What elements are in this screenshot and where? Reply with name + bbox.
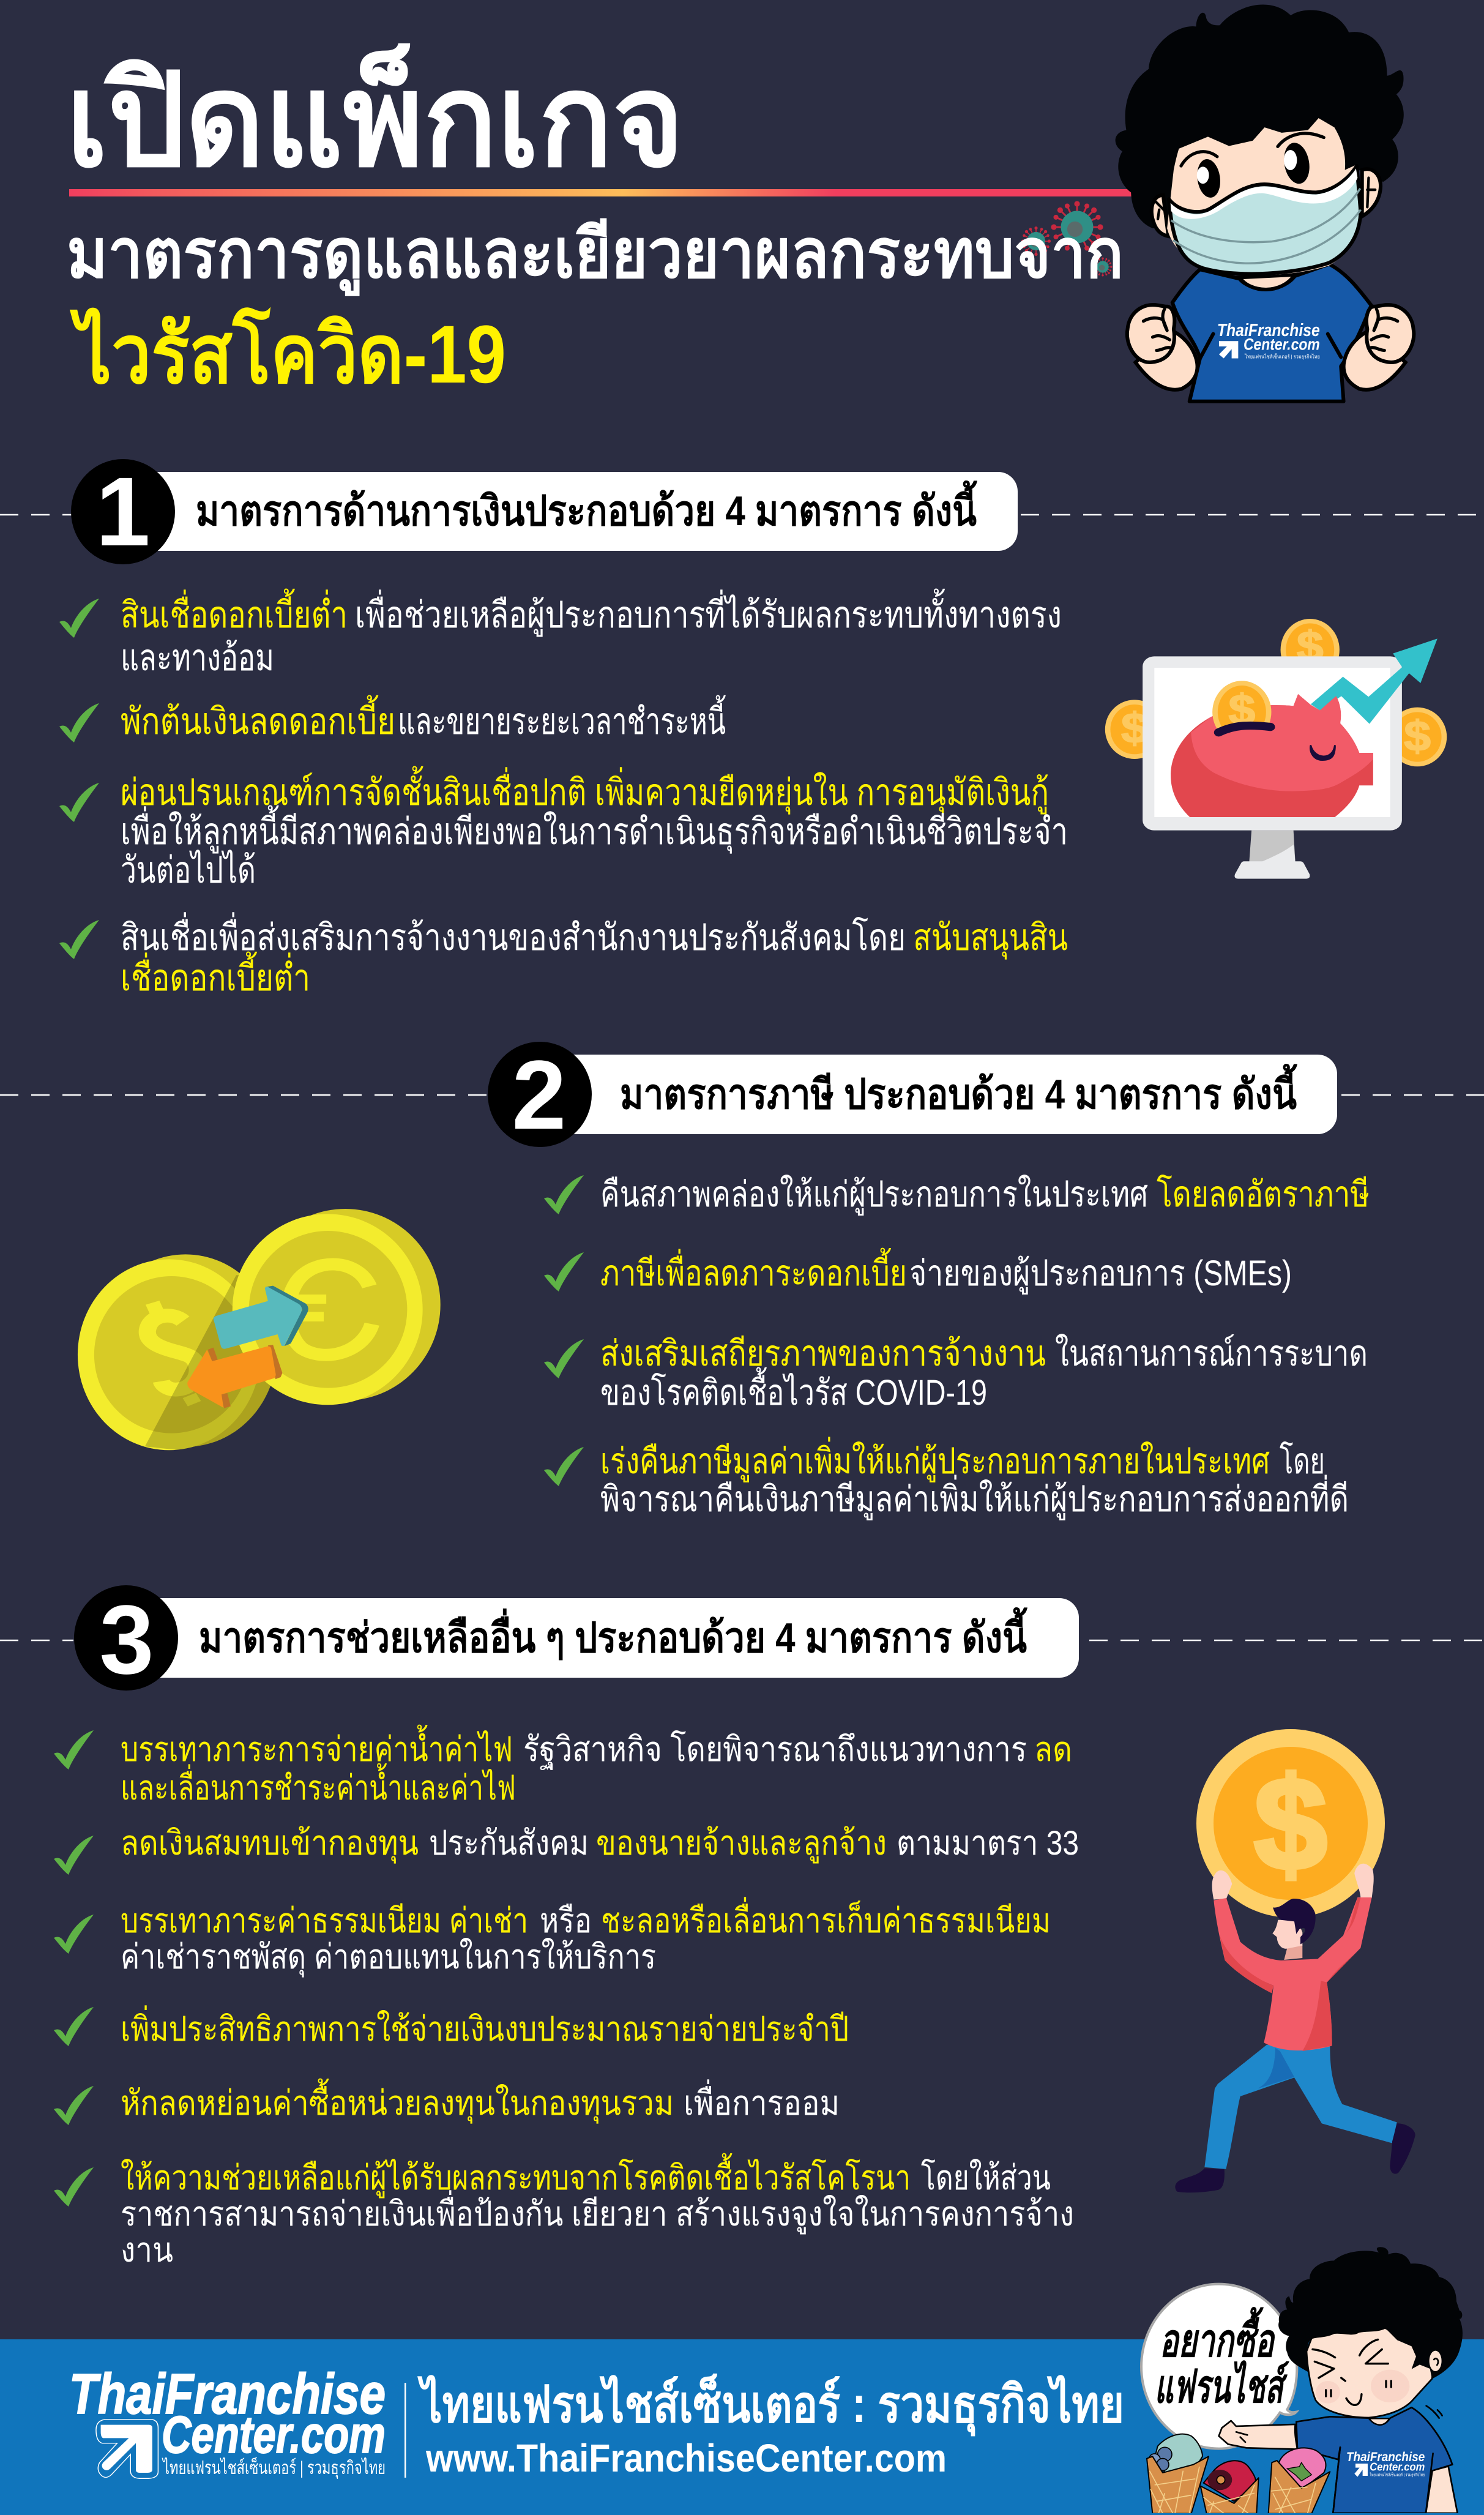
item 1.1 [59,588,1062,678]
item 1.3: เพื่อให้ลูกหนี้มีสภาพคล่องเพียงพอในการดำเนินธุรกิจหรือดำเนินชีวิตประจำ [121,805,1068,854]
coins behind monitor: $ [1297,622,1324,670]
item 2.2: ภาษีเพื่อลดภาระดอกเบี้ย [600,1248,907,1293]
item 3.4: เพิ่มประสิทธิภาพการใช้จ่ายเงินงบประมาณรายจ่ายประจำปี [121,2005,849,2048]
item 3.2: ตามมาตรา 33 [897,1823,1079,1862]
footer logo: Center.com [162,2406,386,2464]
section 3 divider [0,1640,1484,1641]
item 3.1: รัฐวิสาหกิจ โดยพิจารณาถึงแนวทางการ [523,1730,1027,1769]
mascot hair [1116,5,1404,228]
title gradient bar [69,189,1134,196]
speech bubble [1141,2284,1297,2449]
mascot mask [1169,166,1361,274]
section 2 heading [488,1040,1337,1149]
icon: virus cluster [1021,201,1113,277]
section 3 list [54,1725,1079,2269]
piggy bank [1171,681,1373,817]
item 3.3 [54,1897,1051,1978]
shirt logo: ไทยแฟรนไชส์เซ็นเตอร์ | รวมธุรกิจไทย [1369,2472,1425,2478]
item 2.3: ของโรคติดเชื้อไวรัส COVID-19 [600,1367,987,1413]
item 2.2 [544,1248,1292,1295]
mascot right fist [1344,305,1414,390]
section 1 divider [0,514,1484,515]
item 1.3: ผ่อนปรนเกณฑ์การจัดชั้นสินเชื่อปกติ เพิ่มความยืดหยุ่นใน การอนุมัติเงินกู้ [121,766,1049,815]
item 3.2 [54,1823,1079,1875]
item 1.2: และขยายระยะเวลาชำระหนี้ [398,695,726,742]
section 2 heading: มาตรการภาษี ประกอบด้วย 4 มาตรการ ดังนี้ [620,1063,1297,1118]
ice cream: pink [1269,2448,1330,2514]
shirt logo: Center.com [1370,2461,1425,2473]
mascot left fist [1127,305,1198,390]
growth arrow [1311,638,1437,724]
section 2 list [544,1174,1370,1520]
mascot eyes [1195,141,1313,199]
item 3.5: เพื่อการออม [684,2079,840,2122]
item 1.3: วันต่อไปได้ [121,849,256,891]
coins behind monitor: $ [1121,704,1148,752]
item 2.4 [544,1437,1349,1520]
big coin [1196,1729,1385,1918]
euro coin [233,1209,441,1405]
mascot shirt logo: ThaiFranchise [1217,321,1320,340]
mascot shirt logo: Center.com [1244,335,1320,354]
item 3.2: ของนายจ้างและลูกจ้าง [596,1823,887,1864]
head [1307,2328,1434,2418]
speech bubble: แฟรนไชส์ [1155,2360,1289,2412]
footer base line [1132,2513,1484,2515]
item 3.1 [54,1725,1072,1807]
coins behind monitor [1105,619,1447,766]
item 3.3: ค่าเช่าราชพัสดุ ค่าตอบแทนในการให้บริการ [121,1937,656,1978]
highlighted subtitle: ไวรัสโควิด-19 [70,307,506,400]
item 1.1: สินเชื่อดอกเบี้ยต่ำ [121,588,348,635]
item 3.1: และเลื่อนการชำระค่าน้ำและค่าไฟ [121,1763,516,1807]
shirt logo [1346,2450,1425,2478]
mascot shirt logo [1217,321,1320,361]
section 1 heading: มาตรการด้านการเงินประกอบด้วย 4 มาตรการ ดังนี้ [196,480,977,534]
item 1.3 [59,766,1068,891]
item 1.1: และทางอ้อม [121,637,274,678]
piggy bank: $ [1228,686,1255,733]
footer headline: ไทยแฟรนไชส์เซ็นเตอร์ : รวมธุรกิจไทย [417,2373,1124,2437]
item 3.3: บรรเทาภาระค่าธรรมเนียม ค่าเช่า [121,1901,528,1940]
footer url: www.ThaiFranchiseCenter.com [425,2436,947,2480]
item 3.3: ชะลอหรือเลื่อนการเก็บค่าธรรมเนียม [601,1897,1051,1940]
coins behind monitor: $ [1404,712,1431,760]
item 2.3: ในสถานการณ์การระบาด [1055,1333,1368,1373]
illustration: man lifting coin [1175,1729,1415,2192]
item 2.2: จ่ายของผู้ประกอบการ (SMEs) [909,1254,1292,1295]
item 2.4: โดย [1280,1441,1325,1481]
item 3.2: ประกันสังคม [429,1823,589,1862]
subtitle: มาตรการดูแลและเยียวยาผลกระทบจาก [67,215,1124,296]
item 2.1: คืนสภาพคล่องให้แก่ผู้ประกอบการในประเทศ [600,1174,1148,1216]
item 3.6: ราชการสามารถจ่ายเงินเพื่อป้องกัน เยียวยา สร้างแรงจูงใจในการคงการจ้าง [121,2190,1074,2235]
footer logo [69,2362,386,2479]
man figure [1175,1864,1415,2192]
shirt logo: ThaiFranchise [1346,2450,1425,2464]
footer band [0,2339,1484,2515]
illustration: exchange coins [78,1209,441,1463]
footer logo: ThaiFranchise [69,2362,386,2426]
section 1 heading [71,457,1018,566]
section 1 heading: 1 [96,457,150,566]
item 2.1: โดยลดอัตราภาษี [1157,1174,1370,1214]
item 3.3: หรือ [540,1901,592,1940]
dollar coin [77,1254,270,1451]
big coin: $ [1254,1750,1327,1897]
monitor [1143,656,1402,879]
item 2.4: เร่งคืนภาษีมูลค่าเพิ่มให้แก่ผู้ประกอบการภายในประเทศ [600,1437,1270,1482]
item 1.4: เชื่อดอกเบี้ยต่ำ [121,951,310,998]
left arm and hand [1219,2421,1297,2450]
item 1.1: เพื่อช่วยเหลือผู้ประกอบการที่ได้รับผลกระทบทั้งทางตรง [355,588,1062,637]
logo arrow [96,2420,158,2478]
item 3.1: ลด [1034,1730,1072,1768]
teal arrow [214,1286,308,1349]
item 3.2: ลดเงินสมทบเข้ากองทุน [121,1823,419,1864]
section 2 divider [0,1094,1484,1096]
item 2.4: พิจารณาคืนเงินภาษีมูลค่าเพิ่มให้แก่ผู้ประกอบการส่งออกที่ดี [600,1474,1349,1520]
mascot ears [1152,195,1168,236]
item 3.6: โดยให้ส่วน [921,2158,1051,2197]
hair [1278,2247,1463,2379]
ear [1430,2351,1442,2371]
mascot body [1173,264,1371,402]
section 1 list [59,588,1068,998]
item 1.4: สินเชื่อเพื่อส่งเสริมการจ้างงานของสำนักงานประกันสังคมโดย [121,912,906,958]
footer logo: ไทยแฟรนไชส์เซ็นเตอร์ | รวมธุรกิจไทย [162,2456,386,2479]
title: เปิดแพ็กเกจ [66,43,684,193]
item 3.5: หักลดหย่อนค่าซื้อหน่วยลงทุนในกองทุนรวม [121,2079,674,2124]
item 3.6: งาน [121,2230,173,2269]
mascot with mask [1116,5,1414,402]
item 1.2 [59,695,726,742]
shirt and right arm [1296,2406,1458,2513]
item 3.6: ให้ความช่วยเหลือแก่ผู้ได้รับผลกระทบจากโรคติดเชื้อไวรัสโคโรนา [121,2153,911,2199]
ice cream: blue [1147,2434,1209,2514]
section 3 heading [74,1585,1079,1694]
footer divider [405,2383,406,2478]
item 2.3 [544,1333,1368,1413]
item 1.4 [59,912,1068,998]
item 2.3: ส่งเสริมเสถียรภาพของการจ้างงาน [600,1334,1046,1373]
face details [1313,2339,1391,2405]
speech bubble: อยากซื้อ [1160,2307,1275,2366]
orange arrow [187,1345,282,1408]
ice cream: red [1201,2461,1259,2514]
section 3 heading: 3 [100,1585,154,1694]
mascot shirt logo: ไทยแฟรนไชส์เซ็นเตอร์ | รวมธุรกิจไทย [1244,353,1320,361]
item 1.4: สนับสนุนสิน [913,917,1068,960]
item 3.6 [54,2153,1074,2269]
footer mascot with ice cream [1132,2247,1484,2515]
section 2 heading: 2 [512,1040,566,1149]
mascot face [1167,118,1361,275]
item 1.2: พักต้นเงินลดดอกเบี้ย [121,695,395,742]
item 3.5 [54,2079,840,2125]
item 3.1: บรรเทาภาระการจ่ายค่าน้ำค่าไฟ [121,1725,513,1768]
illustration: piggy bank monitor [1105,619,1447,879]
section 3 heading: มาตรการช่วยเหลืออื่น ๆ ประกอบด้วย 4 มาตรการ ดังนี้ [199,1607,1027,1661]
